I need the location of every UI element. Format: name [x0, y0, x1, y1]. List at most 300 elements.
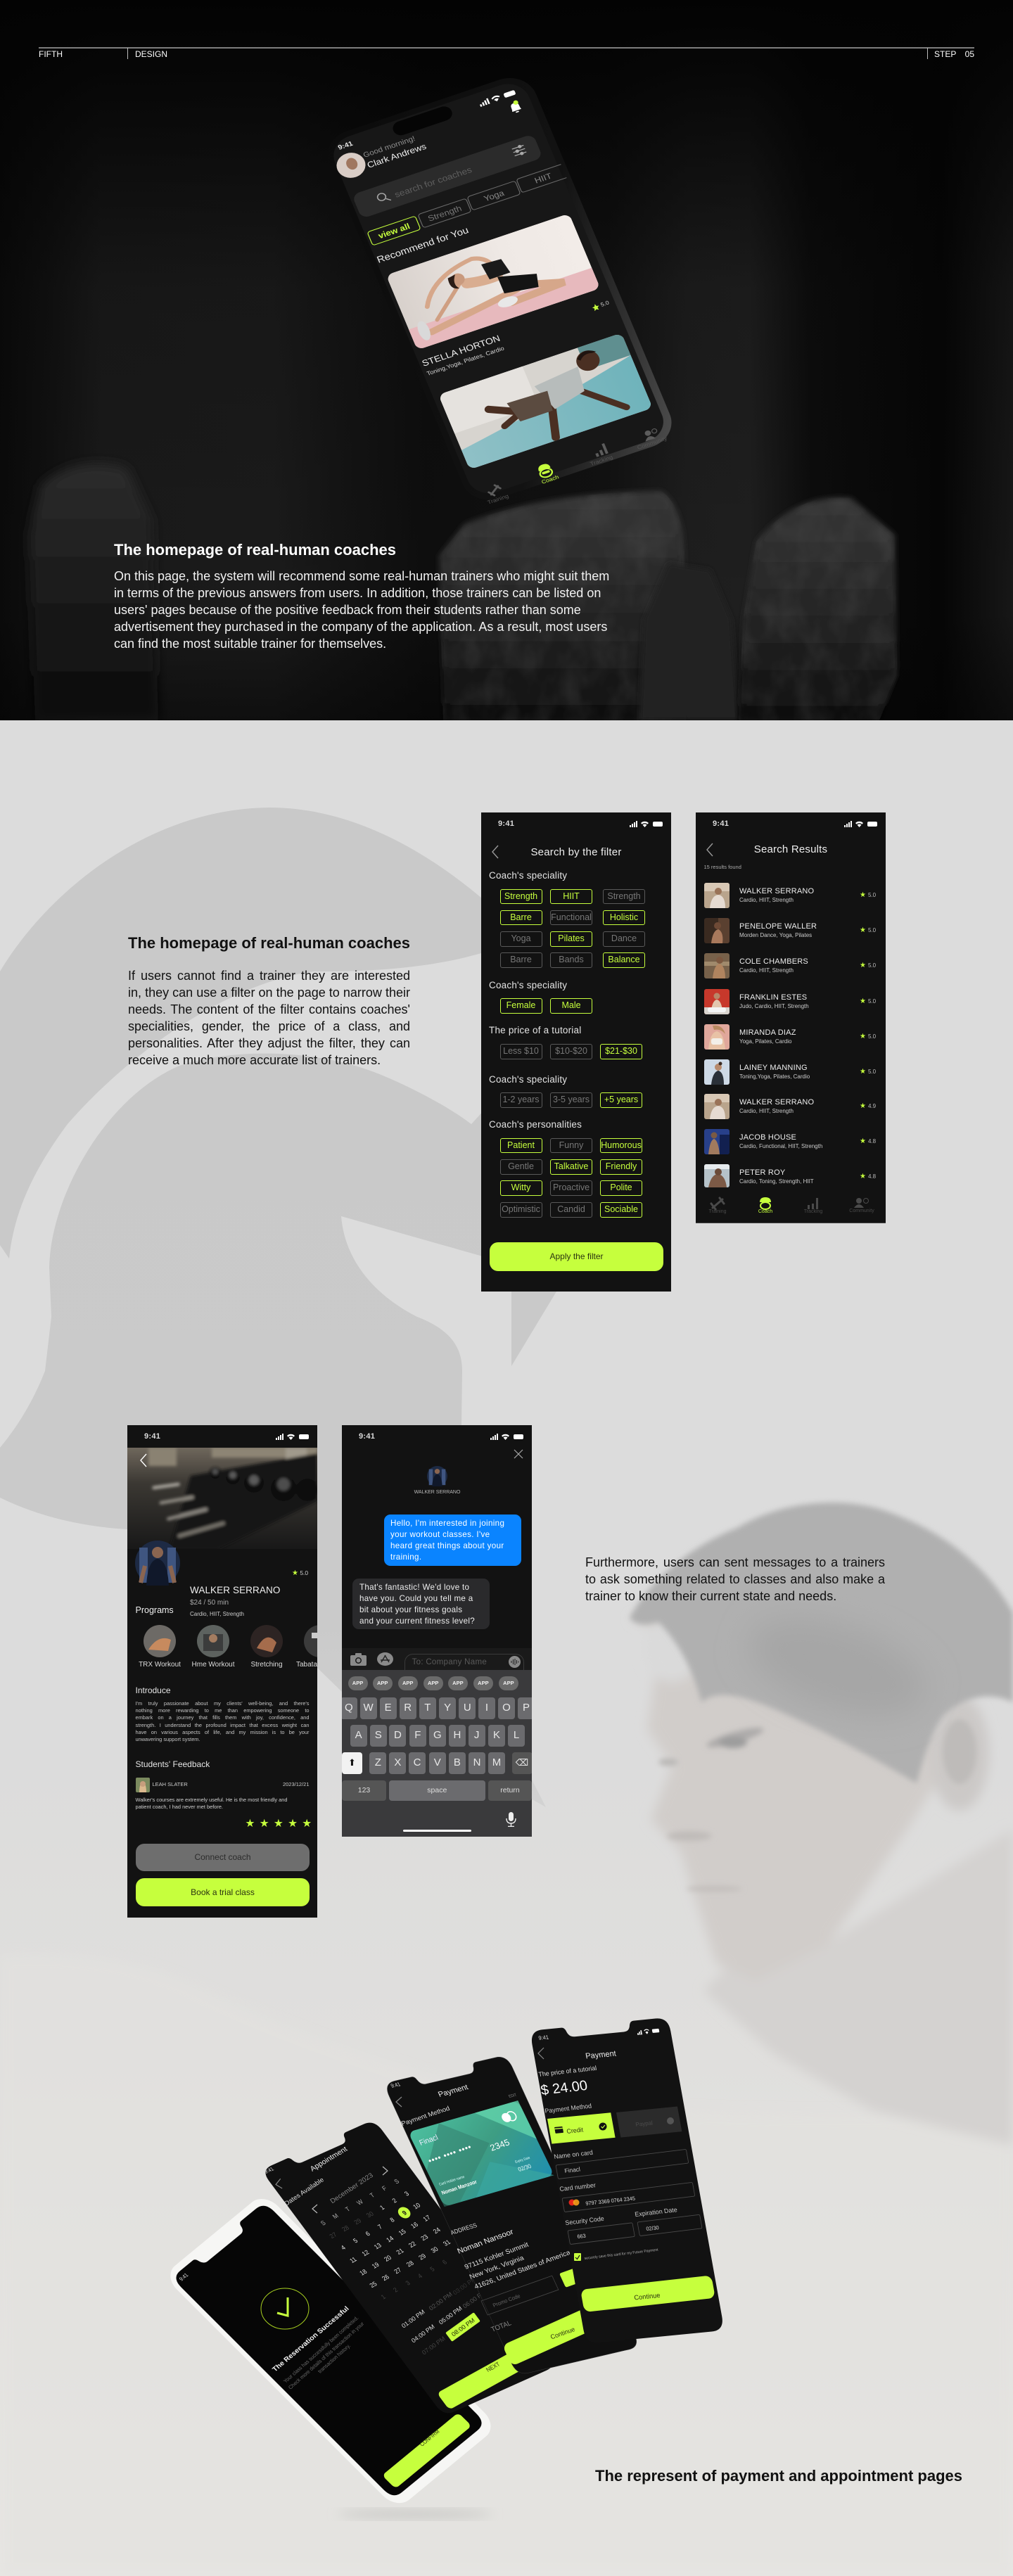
coach name and details: WALKER SERRANO — [190, 1585, 280, 1595]
phone: appointment calendar: Dates Available — [283, 2176, 325, 2207]
filter paragraph — [128, 969, 410, 1067]
phone: reservation successful: 9:41 — [178, 2271, 190, 2283]
icon: camera — [350, 1653, 367, 1666]
letter keys: T — [424, 1702, 431, 1714]
program carousel: Hme Workout — [192, 1661, 234, 1669]
letter keys: P — [523, 1702, 530, 1714]
calendar grid: 20 — [383, 2254, 393, 2263]
message: coach: have you. Could you tell me a — [359, 1594, 473, 1603]
button: continue — [502, 2297, 619, 2366]
order total: TOTAL — [490, 2319, 513, 2334]
phone: payment with card and address: EDIT — [508, 2093, 518, 2099]
phone: payment with card and address: Payment Method — [400, 2105, 451, 2127]
result row: Cole Chambers: COLE CHAMBERS — [739, 957, 808, 966]
review text: patient coach, I had never met before. — [135, 1804, 223, 1810]
filter group: experience: +5 years — [604, 1095, 638, 1104]
promo code field — [481, 2268, 582, 2315]
coach biography: have on various aspects of life, and my mission is to be your — [135, 1729, 310, 1735]
filter group: price: $21-$30 — [605, 1046, 637, 1056]
filter tabs: HIIT — [533, 171, 554, 185]
heading: Programs: Programs — [135, 1605, 174, 1615]
calendar grid: 26 — [381, 2273, 390, 2282]
payment card: Finacl — [418, 2134, 440, 2148]
letter keys: D — [394, 1729, 402, 1741]
delivery address: ADDRESS — [450, 2221, 478, 2236]
key: space: space — [427, 1786, 447, 1794]
calendar grid: S — [393, 2177, 401, 2185]
hero text block — [114, 541, 609, 651]
phone: payment with card and address — [383, 2055, 640, 2376]
filter group: personalities: Optimistic — [502, 1204, 540, 1214]
letter keys: Y — [444, 1702, 451, 1714]
program carousel — [139, 1625, 317, 1669]
program carousel: Stretching — [250, 1661, 283, 1669]
search bar — [352, 134, 543, 219]
filter group: experience: Coach's speciality — [489, 1074, 567, 1085]
letter keys — [342, 1695, 532, 1804]
result row: Walker Serrano second — [704, 1094, 876, 1119]
calendar grid: 5 — [428, 2265, 436, 2273]
filter tabs — [367, 165, 566, 246]
result row: Franklin Estes: Judo, Cardio, HIIT, Strength — [739, 1003, 809, 1009]
filter paragraph: personalities. After they adjust the filter, they can — [128, 1036, 410, 1050]
reservation message: transaction history. — [317, 2342, 352, 2374]
furthermore paragraph: to ask something related to classes and also make a — [585, 1572, 885, 1586]
time slots: 03:00 PM — [452, 2275, 478, 2297]
result row: Penelope Waller: PENELOPE WALLER — [739, 922, 817, 931]
letter keys: E — [385, 1702, 392, 1714]
calendar grid: 3 — [403, 2190, 410, 2198]
letter keys: O — [502, 1702, 511, 1714]
reviewer avatar — [136, 1778, 150, 1792]
letter keys: X — [394, 1756, 401, 1768]
calendar grid: 8 — [388, 2216, 396, 2224]
result row: Walker Serrano: ★ 5.0 — [860, 891, 876, 899]
calendar grid: M — [331, 2212, 340, 2220]
phone screen: search results — [696, 812, 886, 1223]
result row: Walker Serrano — [704, 883, 876, 908]
card form fields: 02/30 — [646, 2224, 659, 2232]
heading: Recommend for You: Recommend for You — [376, 225, 471, 265]
payment method options — [544, 2102, 682, 2144]
calendar grid: 5 — [352, 2237, 359, 2245]
phone: payment with card and address: Payment — [437, 2083, 470, 2099]
calendar grid — [318, 2176, 462, 2302]
bottom navigation: Training — [487, 493, 510, 506]
filter group: speciality: Coach's speciality — [489, 870, 567, 881]
result row: Penelope Waller: ★ 5.0 — [860, 926, 876, 934]
letter keys: I — [485, 1702, 488, 1714]
user greeting: Clark Andrews — [366, 141, 428, 170]
result row: Cole Chambers: Cardio, HIIT, Strength — [739, 967, 794, 974]
phone: appointment calendar: Appointment — [309, 2145, 349, 2173]
result row: Jacob House: JACOB HOUSE — [739, 1133, 796, 1142]
key: return — [488, 1780, 532, 1801]
bottom navigation: Tracking — [590, 454, 614, 467]
calendar grid: 21 — [395, 2247, 405, 2256]
filter group: gender: Coach's speciality — [489, 980, 567, 990]
calendar grid: 16 — [409, 2221, 420, 2230]
button: next: NEXT — [485, 2361, 502, 2373]
filter group: speciality: Functional — [551, 912, 592, 922]
status bar — [144, 1432, 309, 1441]
bottom navigation: Coach — [541, 474, 560, 485]
filter group: personalities: Witty — [511, 1182, 530, 1192]
filter group: speciality: Pilates — [558, 933, 585, 943]
reservation message: The Reservation Successful — [271, 2305, 351, 2373]
calendar grid: T — [368, 2191, 376, 2199]
rating: 5.0: 5.0 — [599, 300, 611, 308]
filter group: price: The price of a tutorial — [489, 1025, 581, 1035]
calendar grid: 2 — [392, 2286, 400, 2294]
card form fields: Name on card — [554, 2149, 594, 2160]
message input bar — [342, 1648, 532, 1670]
time slots: 05:00 PM — [438, 2304, 464, 2326]
status bar — [498, 820, 663, 828]
time slots: 07:00 PM — [421, 2335, 447, 2357]
letter keys: F — [414, 1729, 421, 1741]
calendar grid: 30 — [364, 2210, 375, 2219]
button: book a trial class — [136, 1878, 310, 1906]
coach contact: WALKER SERRANO — [414, 1490, 460, 1495]
phone: payment with card and address: 9:41 — [390, 2081, 402, 2089]
payment card: 2345 — [488, 2138, 511, 2153]
hero paragraph: can find the most suitable trainer for themselves. — [114, 637, 386, 651]
filter group: speciality: Strength — [607, 891, 641, 901]
coach biography: embark on a journey that fills them with joy, confidence, and — [135, 1714, 310, 1721]
card form fields: 9797 3369 0764 2345 — [585, 2195, 636, 2207]
letter keys: M — [492, 1756, 501, 1768]
card form fields: Card number — [559, 2181, 597, 2193]
calendar grid: 3 — [404, 2279, 412, 2287]
card form fields — [554, 2149, 702, 2245]
calendar grid: 1 — [379, 2293, 387, 2300]
app suggestion row: APP — [352, 1680, 363, 1685]
letter keys: R — [404, 1702, 412, 1714]
bottom navigation: Community — [637, 435, 669, 451]
message: user: heard great things about your — [390, 1541, 504, 1550]
icon: app store — [377, 1652, 393, 1666]
letter keys: Z — [375, 1756, 381, 1768]
filter group: personalities: Polite — [610, 1182, 632, 1192]
heading: Students' Feedback: Students' Feedback — [135, 1759, 210, 1769]
letter keys: L — [514, 1729, 519, 1741]
bottom navigation — [696, 1191, 886, 1223]
letter keys: B — [454, 1756, 461, 1768]
status bar: 9:41 — [144, 1432, 160, 1441]
calendar grid: 28 — [340, 2224, 350, 2233]
price summary — [538, 2065, 597, 2098]
payment card: •••• •••• •••• — [427, 2143, 473, 2166]
button: apply the filter: Apply the filter — [549, 1251, 604, 1261]
delivery address: 97115 Kohler Summit — [464, 2241, 530, 2271]
filter group: speciality: Bands — [559, 955, 584, 964]
result row: Franklin Estes: FRANKLIN ESTES — [739, 993, 807, 1002]
phone: payment form — [530, 2017, 725, 2344]
reviewer name: LEAH SLATER — [152, 1781, 188, 1787]
price summary: The price of a tutorial — [538, 2065, 597, 2078]
coach biography: strength. I understand the profound impact that excess weight can — [135, 1722, 310, 1728]
filter group: speciality: Barre — [510, 912, 532, 922]
phone: payment form: Payment — [585, 2050, 618, 2061]
furthermore paragraph: trainer to know their current state and needs. — [585, 1589, 836, 1603]
calendar grid: 1 — [378, 2204, 386, 2211]
calendar grid: 19 — [370, 2261, 381, 2270]
result row: Peter Roy: PETER ROY — [739, 1168, 785, 1177]
reservation message: Your class has successfully been completed. — [282, 2315, 360, 2384]
calendar grid: 25 — [368, 2280, 378, 2289]
filter group: speciality: HIIT — [563, 891, 580, 901]
filter group: personalities: Sociable — [604, 1204, 638, 1214]
delivery address: 41626, United States of America — [473, 2249, 572, 2291]
result row: Penelope Waller — [704, 918, 876, 943]
status bar — [713, 820, 877, 828]
letter keys: V — [434, 1756, 441, 1768]
time slots: 01:00 PM — [400, 2308, 426, 2330]
status bar: 9:41 — [713, 820, 729, 828]
filter tabs: Strength — [426, 204, 463, 223]
button: book a trial class: Book a trial class — [191, 1887, 255, 1897]
message: user: your workout classes. I've — [390, 1530, 490, 1539]
filter group: price: Less $10 — [503, 1046, 539, 1056]
filter group: personalities: Proactive — [553, 1182, 590, 1192]
coach name and details: $24 / 50 min — [190, 1599, 229, 1607]
message field: To: Company Name — [412, 1658, 487, 1666]
filter group: personalities: Talkative — [554, 1161, 588, 1171]
letter keys: ⌫ — [516, 1757, 528, 1768]
calendar grid: 11 — [348, 2255, 358, 2264]
message field — [404, 1654, 524, 1670]
bottom caption: The represent of payment and appointment pages — [595, 2467, 962, 2485]
calendar grid: 24 — [432, 2226, 442, 2235]
heading: Introduce: Introduce — [135, 1685, 171, 1695]
search bar: search for coaches — [393, 165, 473, 200]
result row: Cole Chambers: ★ 5.0 — [860, 962, 876, 969]
hero heading: The homepage of real-human coaches — [114, 541, 396, 559]
message: user — [384, 1515, 521, 1566]
calendar grid: 31 — [442, 2238, 452, 2247]
calendar grid: 6 — [441, 2258, 448, 2266]
header rule: section index — [39, 47, 974, 59]
result row: Lainey Manning: ★ 5.0 — [860, 1068, 876, 1076]
filter group: personalities: Funny — [559, 1140, 583, 1150]
review text: Walker's courses are extremely useful. He is the most friendly and — [135, 1797, 287, 1803]
filter group: speciality: Holistic — [610, 912, 638, 922]
result row: Walker Serrano: Cardio, HIIT, Strength — [739, 897, 794, 903]
filter group: speciality: Barre — [510, 955, 532, 964]
delivery address: New York, Virginia — [469, 2255, 525, 2281]
time slots: 08:00 PM — [450, 2316, 476, 2338]
payment card: Noman Manzoor — [440, 2179, 478, 2196]
filter group: gender: Female — [507, 1000, 535, 1010]
result row: Peter Roy: ★ 4.8 — [860, 1173, 876, 1180]
hero paragraph: users' pages because of the positive feedback from their students rather than some — [114, 603, 581, 617]
calendar grid: 10 — [412, 2201, 422, 2210]
back arrow — [492, 846, 498, 858]
result row: Cole Chambers — [704, 953, 876, 978]
filter group: price: $10-$20 — [555, 1046, 587, 1056]
letter keys: C — [414, 1756, 421, 1768]
coach avatar — [135, 1541, 180, 1586]
calendar grid: 2 — [390, 2197, 398, 2205]
result row: Lainey Manning — [704, 1059, 876, 1085]
filter group: speciality: Dance — [611, 933, 637, 943]
button: continue: Continue — [549, 2326, 576, 2340]
result row: Miranda Diaz — [704, 1024, 876, 1050]
save card checkbox: securely save this card for my Future Payment — [584, 2248, 659, 2261]
icon: success check — [261, 2288, 309, 2329]
delivery address — [450, 2221, 572, 2291]
status bar: 9:41 — [359, 1432, 375, 1441]
bottom navigation: Community — [849, 1209, 874, 1213]
time slots — [400, 2275, 488, 2357]
coach name and details — [190, 1585, 280, 1617]
results count: 15 results found — [703, 864, 741, 870]
filter paragraph: specialities, gender, the price of a class, and — [128, 1019, 410, 1033]
phone: reservation successful — [163, 2192, 498, 2510]
message: coach — [352, 1579, 490, 1629]
calendar grid: 17 — [421, 2214, 432, 2223]
payment method options: Credit — [566, 2126, 584, 2135]
button: next — [437, 2349, 530, 2410]
key: space — [389, 1780, 485, 1801]
button: confirm — [382, 2413, 471, 2489]
coach caption: Stella Horton: Toning,Yoga, Pilates, Cardio — [426, 345, 505, 377]
calendar grid: S — [319, 2219, 327, 2227]
hero paragraph: On this page, the system will recommend some real-human trainers who might suit them — [114, 569, 609, 583]
header label: FIFTH: FIFTH — [39, 49, 63, 59]
price summary: $ 24.00 — [540, 2078, 589, 2098]
result row: Miranda Diaz: Yoga, Pilates, Cardio — [739, 1038, 791, 1045]
calendar grid: 30 — [429, 2245, 440, 2255]
calendar grid: 29 — [417, 2252, 428, 2262]
key: return: return — [500, 1786, 520, 1794]
filter group: speciality: Yoga — [511, 933, 531, 943]
coach rating: ★ 5.0 — [292, 1569, 308, 1577]
program carousel: TRX Workout — [139, 1661, 181, 1669]
card form fields: Security Code — [565, 2215, 605, 2226]
photo: yoga stretch — [386, 213, 601, 350]
hero paragraph: advertisement they purchased in the company of the application. As a result, most users — [114, 620, 607, 634]
filter group: gender — [489, 980, 592, 1014]
filter group: personalities: Humorous — [601, 1140, 642, 1150]
coach contact — [414, 1466, 460, 1495]
coach biography: I'm truly passionate about my clients' well-being, and there's — [135, 1700, 310, 1707]
time slots: 04:00 PM — [410, 2323, 436, 2345]
payment card: 02/30 — [517, 2163, 533, 2173]
letter keys: N — [473, 1756, 480, 1768]
reservation message: Check more details of this transaction in your — [287, 2320, 366, 2390]
status bar — [337, 89, 516, 152]
bottom navigation: Coach — [758, 1209, 772, 1214]
filter tabs: Yoga — [483, 189, 506, 203]
calendar grid: 27 — [393, 2266, 403, 2275]
filter group: personalities: Coach's personalities — [489, 1119, 582, 1130]
calendar grid: 9 — [401, 2209, 408, 2217]
filter group: speciality: Strength — [504, 891, 537, 901]
letter keys: J — [474, 1729, 479, 1741]
coach name and details: Cardio, HIIT, Strength — [190, 1611, 244, 1617]
calendar grid: 27 — [328, 2231, 338, 2240]
hero phone: coach homepage mockup — [333, 78, 671, 506]
button: connect coach: Connect coach — [194, 1851, 251, 1861]
app suggestion row: APP — [503, 1680, 514, 1685]
calendar grid: T — [344, 2205, 352, 2213]
filter tabs: view all — [377, 222, 412, 241]
button: confirm: CONFIRM — [419, 2428, 441, 2448]
icon: notification bell — [509, 100, 522, 114]
home indicator — [403, 1830, 471, 1832]
furthermore paragraph — [585, 1554, 885, 1605]
filter group: personalities: Gentle — [508, 1161, 534, 1171]
filter group: experience: 1-2 years — [502, 1095, 540, 1104]
card form fields: Expiration Date — [635, 2206, 677, 2218]
result row: Miranda Diaz: MIRANDA DIAZ — [739, 1028, 796, 1037]
filter text block — [128, 934, 410, 1067]
result row: Walker Serrano second: ★ 4.9 — [860, 1102, 876, 1110]
button: apply the filter — [490, 1242, 663, 1271]
filter group: personalities: Candid — [557, 1204, 585, 1214]
coach biography: unwavering support system. — [135, 1736, 200, 1742]
key: 123: 123 — [358, 1786, 370, 1794]
letter keys: H — [453, 1729, 461, 1741]
calendar grid: 23 — [419, 2233, 430, 2242]
payment method options: Payment Method — [544, 2102, 592, 2115]
result row: Penelope Waller: Morden Dance, Yoga, Pilates — [739, 932, 812, 938]
user greeting: Good morning! — [362, 135, 416, 160]
calendar grid: 29 — [352, 2217, 363, 2226]
five star rating: ★★★★★ — [245, 1818, 316, 1830]
filter group: gender: Male — [561, 1000, 581, 1010]
button: continue: Continue — [633, 2291, 661, 2302]
calendar grid: 13 — [373, 2242, 383, 2250]
app suggestion row — [342, 1425, 532, 1692]
message: user: training. — [390, 1552, 421, 1562]
calendar grid: W — [355, 2198, 365, 2207]
calendar grid: 14 — [385, 2235, 395, 2243]
review text — [135, 1797, 287, 1810]
status bar: 9:41 — [337, 140, 355, 152]
result row: Peter Roy — [704, 1164, 876, 1187]
program carousel: Tabata — [296, 1661, 317, 1669]
status bar: 9:41 — [498, 820, 514, 828]
review date: 2023/12/21 — [283, 1781, 310, 1787]
coach biography: nothing more rewarding to me than empowering someone to — [135, 1707, 310, 1714]
cover photo: dumbbell rack — [127, 1448, 317, 1549]
calendar grid: 28 — [404, 2259, 415, 2268]
filter group: speciality — [489, 870, 645, 968]
bottom navigation: Training — [708, 1209, 727, 1214]
message: coach: and your current fitness level? — [359, 1617, 475, 1626]
calendar grid: 18 — [358, 2268, 369, 2277]
app suggestion row: APP — [452, 1680, 464, 1685]
screen title: Search by the filter — [530, 846, 622, 858]
app suggestion row: APP — [478, 1680, 489, 1685]
message: coach: bit about your fitness goals — [359, 1605, 462, 1614]
payment card: Card Holder name — [438, 2175, 466, 2187]
feedback card — [135, 1778, 316, 1830]
phone screen: chat with coach — [342, 1425, 532, 1837]
result row: Walker Serrano second: WALKER SERRANO — [739, 1098, 814, 1107]
phone screen: coach profile — [127, 1425, 317, 1918]
phone: appointment calendar — [261, 2119, 557, 2416]
result row: Walker Serrano second: Cardio, HIIT, Strength — [739, 1108, 794, 1114]
result row: Jacob House: ★ 4.8 — [860, 1137, 876, 1145]
reservation message — [271, 2305, 366, 2390]
filter group: speciality: Balance — [608, 955, 640, 964]
letter keys: S — [375, 1729, 382, 1741]
calendar grid: 7 — [376, 2223, 383, 2231]
